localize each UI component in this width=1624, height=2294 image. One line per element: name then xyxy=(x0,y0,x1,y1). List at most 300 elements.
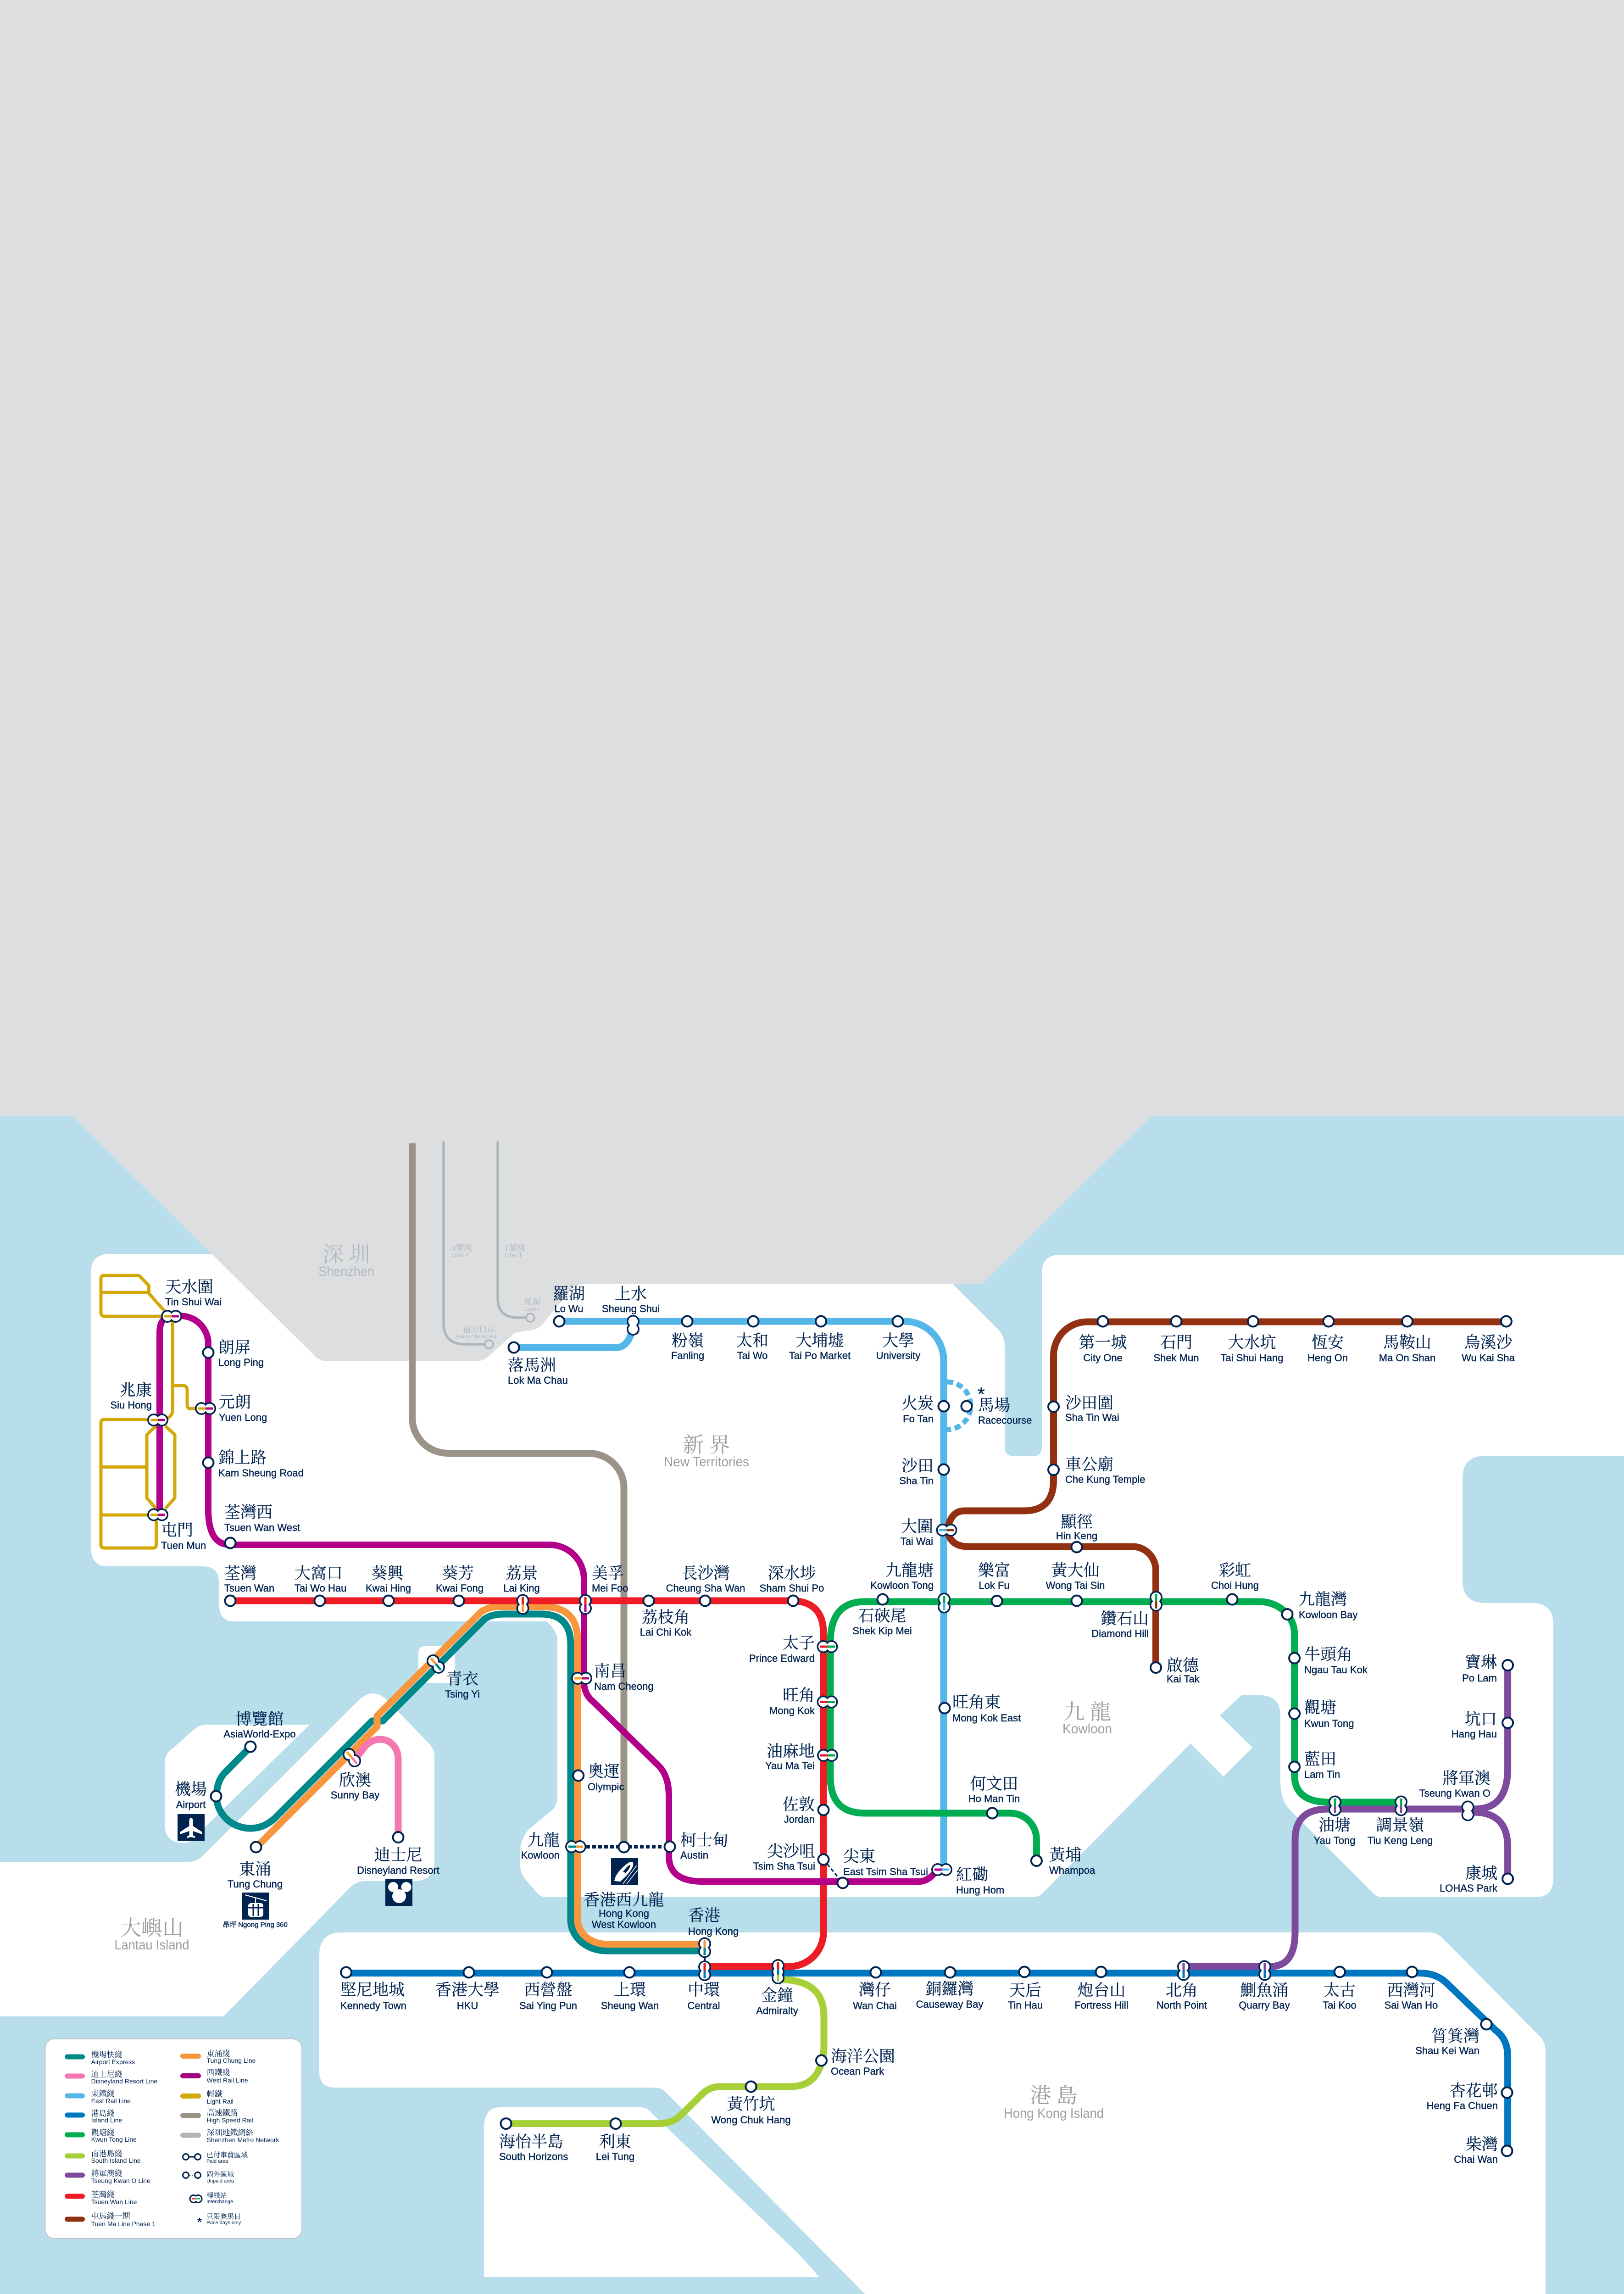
station: Cheung Sha Wan: 長沙灣 xyxy=(681,1565,730,1582)
station: Hang Hau: Hang Hau xyxy=(1452,1728,1497,1740)
station: Chai Wan: 柴灣 xyxy=(1466,2136,1498,2154)
station: Sai Ying Pun: Sai Ying Pun xyxy=(519,2000,577,2011)
station: Heng On: 恆安 xyxy=(1312,1334,1344,1352)
legend: Island Line: 港島綫 xyxy=(91,2109,115,2118)
station: South Horizons: 海怡半島 xyxy=(499,2133,563,2151)
land: Hong Kong Island xyxy=(319,1932,1546,2294)
legend: Tseung Kwan O Line xyxy=(65,2169,150,2184)
Luohu label: Luohu xyxy=(525,1307,539,1312)
station: Sha Tin: Sha Tin xyxy=(899,1475,934,1487)
legend: East Rail Line: 東鐵綫 xyxy=(91,2089,115,2098)
station: Fo Tan xyxy=(901,1395,949,1425)
station: Hong Kong: 香港 xyxy=(688,1907,720,1925)
legend: High Speed Rail: 高速鐵路 xyxy=(206,2109,238,2117)
station: Hong Kong West Kowloon: Hong Kong xyxy=(599,1908,649,1919)
legend: Tung Chung Line: 東涌綫 xyxy=(206,2049,230,2058)
station: Hin Keng: Hin Keng xyxy=(1056,1530,1097,1542)
station: Causeway Bay: Causeway Bay xyxy=(916,1999,983,2010)
station: Ho Man Tin: Ho Man Tin xyxy=(968,1793,1020,1804)
line 1 label xyxy=(505,1243,525,1258)
station: Lok Fu xyxy=(978,1562,1010,1606)
station: Lok Ma Chau: Lok Ma Chau xyxy=(508,1375,568,1386)
station: Ocean Park: Ocean Park xyxy=(831,2066,884,2077)
icon: airport plane xyxy=(178,1814,205,1841)
station: Kwai Fong xyxy=(436,1565,484,1606)
metro line 4 xyxy=(444,1141,484,1344)
region label: Shenzhen: 深 圳 xyxy=(323,1243,370,1266)
station: Che Kung Temple xyxy=(1048,1456,1145,1485)
station: Shau Kei Wan: 筲箕灣 xyxy=(1431,2027,1479,2045)
station: Tseung Kwan O: Tseung Kwan O xyxy=(1419,1787,1491,1799)
shenzhen metro lines xyxy=(444,1141,540,1348)
station: Sha Tin Wai xyxy=(1048,1394,1119,1423)
station: Wong Tai Sin: Wong Tai Sin xyxy=(1046,1580,1105,1591)
line: Tsuen Wan Line xyxy=(230,1601,823,1966)
legend: Paid area: Paid area xyxy=(206,2159,228,2164)
station: Tai Wo xyxy=(736,1316,768,1361)
station: Wong Chuk Hang xyxy=(711,2081,791,2126)
station: Causeway Bay: 銅鑼灣 xyxy=(925,1980,974,1998)
legend: Race days only: Race days only xyxy=(206,2220,241,2226)
station: Yau Tong xyxy=(1314,1796,1355,1846)
station: Tai Koo xyxy=(1323,1966,1357,2011)
station: Disneyland Resort xyxy=(357,1832,439,1876)
station: Kam Sheung Road: 錦上路 xyxy=(218,1449,267,1467)
station: Sheung Shui: Sheung Shui xyxy=(602,1303,660,1314)
station: Lai Chi Kok: Lai Chi Kok xyxy=(640,1626,692,1638)
station: Austin: Austin xyxy=(680,1849,708,1861)
legend: Tuen Ma Line Phase 1 xyxy=(65,2212,156,2227)
legend: Light Rail: Light Rail xyxy=(206,2098,234,2105)
station: Heng Fa Chuen xyxy=(1427,2082,1512,2111)
line: West Rail Line xyxy=(160,1316,937,1882)
station: Lei Tung xyxy=(596,2118,634,2162)
station: Tin Hau: Tin Hau xyxy=(1008,1999,1043,2011)
station: Cheung Sha Wan: Cheung Sha Wan xyxy=(666,1582,745,1594)
panel: legend xyxy=(45,2039,302,2238)
station: Shek Kip Mei xyxy=(852,1594,912,1637)
station: Tuen Mun xyxy=(147,1509,206,1551)
station: University: 大學 xyxy=(882,1332,914,1350)
station: Tai Po Market xyxy=(789,1316,851,1361)
land: Tsing Yi island xyxy=(418,1646,455,1683)
station: HKU xyxy=(435,1967,500,2011)
legend: Shenzhen Metro Network: Shenzhen Metro Network xyxy=(206,2136,279,2144)
line: Tseung Kwan O Line xyxy=(1184,1665,1508,1966)
station: Mong Kok: Mong Kok xyxy=(769,1705,815,1716)
station: Sheung Shui xyxy=(602,1285,660,1336)
station: Lai King xyxy=(503,1565,540,1615)
station: Long Ping: 朗屏 xyxy=(218,1339,250,1357)
legend: Tseung Kwan O Line: 將軍澳綫 xyxy=(91,2169,122,2178)
station: Kwai Fong: Kwai Fong xyxy=(436,1582,484,1594)
legend: Paid area: 已付車費區域 xyxy=(206,2151,248,2159)
station: Lai King: Lai King xyxy=(503,1582,540,1594)
station: Nam Cheong: 南昌 xyxy=(594,1662,626,1680)
station: Tin Shui Wai: Tin Shui Wai xyxy=(165,1296,222,1308)
station: Central: Central xyxy=(688,2000,720,2011)
station: Tai Shui Hang: Tai Shui Hang xyxy=(1221,1352,1283,1364)
station: Tin Shui Wai xyxy=(161,1278,222,1323)
legend: West Rail Line xyxy=(180,2068,248,2084)
station: Mong Kok East: 旺角東 xyxy=(952,1693,1001,1711)
station: Tsing Yi xyxy=(427,1654,480,1700)
station: Ngau Tau Kok: Ngau Tau Kok xyxy=(1304,1664,1368,1676)
station: Heng Fa Chuen: Heng Fa Chuen xyxy=(1427,2100,1498,2111)
station: Tai Po Market: Tai Po Market xyxy=(789,1350,851,1361)
station: Racecourse: Racecourse xyxy=(978,1414,1032,1426)
station: Shek Mun: 石門 xyxy=(1160,1334,1192,1352)
station: Tsing Yi: 青衣 xyxy=(446,1670,478,1688)
station: Kai Tak: Kai Tak xyxy=(1167,1673,1200,1685)
station: Disneyland Resort: Disneyland Resort xyxy=(357,1865,439,1876)
legend: East Rail Line: East Rail Line xyxy=(91,2097,131,2105)
link: Kowloon to Austin dotted unpaid xyxy=(580,1845,670,1849)
line 4 label: 4號綫 xyxy=(451,1243,472,1253)
legend: Race days only: * xyxy=(197,2215,202,2229)
station: Wan Chai xyxy=(853,1967,897,2011)
station: Sheung Shui: 上水 xyxy=(615,1285,647,1303)
legend: Tsuen Wan Line xyxy=(65,2190,137,2205)
Futian label: Futian Checkpoint xyxy=(456,1334,496,1340)
legend: Kwun Tong Line: 觀塘綫 xyxy=(91,2128,115,2137)
station: University xyxy=(876,1316,920,1361)
station: Wong Chuk Hang: Wong Chuk Hang xyxy=(711,2114,791,2126)
station: Lo Wu: Lo Wu xyxy=(554,1303,584,1314)
station: Sunny Bay xyxy=(331,1748,379,1801)
station: Jordan xyxy=(783,1796,829,1825)
Luohu label: 羅湖 xyxy=(524,1297,540,1306)
station: Kowloon xyxy=(521,1832,586,1861)
station: Yau Ma Tei xyxy=(765,1743,838,1771)
station: Fortress Hill: 炮台山 xyxy=(1077,1982,1126,1999)
station: Yuen Long xyxy=(195,1393,267,1423)
land: Ap Lei Chau xyxy=(484,2107,819,2277)
station: Hin Keng: 顯徑 xyxy=(1061,1513,1093,1531)
station: Airport: 機場 xyxy=(175,1781,207,1798)
station: Shek Mun: Shek Mun xyxy=(1153,1352,1199,1364)
station: Hang Hau: 坑口 xyxy=(1465,1710,1497,1728)
legend: High Speed Rail: High Speed Rail xyxy=(206,2116,253,2124)
line: Light Rail xyxy=(101,1275,200,1548)
station: Chai Wan: Chai Wan xyxy=(1454,2154,1498,2165)
region label: Hong Kong Island: 港 島 xyxy=(1030,2084,1078,2107)
station: Racecourse: 馬場 xyxy=(978,1397,1010,1414)
station: Shek Kip Mei: Shek Kip Mei xyxy=(852,1625,912,1637)
legend: Unpaid area: 閘外區域 xyxy=(206,2171,234,2178)
station: Kwai Hing xyxy=(366,1565,411,1606)
station: Po Lam: 寶琳 xyxy=(1465,1654,1497,1671)
station: Heng On xyxy=(1307,1316,1348,1364)
station: Kowloon Tong: Kowloon Tong xyxy=(870,1580,934,1591)
station: Fo Tan: Fo Tan xyxy=(903,1413,934,1425)
station: Ho Man Tin xyxy=(968,1775,1020,1819)
line: Disneyland Resort Line xyxy=(355,1739,398,1837)
station: Fanling: Fanling xyxy=(671,1350,704,1361)
Luohu station xyxy=(526,1314,534,1322)
icon: high speed train xyxy=(611,1858,638,1885)
station: Choi Hung: Choi Hung xyxy=(1211,1580,1259,1591)
legend: Kwun Tong Line: Kwun Tong Line xyxy=(91,2136,137,2143)
station: Tsim Sha Tsui: Tsim Sha Tsui xyxy=(753,1860,815,1872)
station: Sha Tin xyxy=(899,1457,949,1487)
station: Lai King: 荔景 xyxy=(506,1565,538,1582)
station: Lok Fu: 樂富 xyxy=(978,1562,1010,1580)
legend: Unpaid area xyxy=(183,2171,234,2184)
land: airport island xyxy=(165,1725,310,1843)
station: Sunny Bay: 欣澳 xyxy=(339,1771,371,1789)
station: North Point: 北角 xyxy=(1166,1982,1198,1999)
station: Tin Hau xyxy=(1008,1966,1043,2011)
legend: Interchange: 轉綫站 xyxy=(206,2191,227,2199)
station: Admiralty: Admiralty xyxy=(756,2005,798,2016)
station: Ngau Tau Kok xyxy=(1289,1646,1368,1676)
station: Sheung Wan: Sheung Wan xyxy=(601,2000,659,2011)
station: HKU: 香港大學 xyxy=(435,1981,500,1999)
legend: High Speed Rail xyxy=(180,2109,253,2124)
station: Olympic: Olympic xyxy=(588,1781,624,1793)
region label: Hong Kong Island: Hong Kong Island xyxy=(1004,2106,1104,2121)
station: Sai Wan Ho xyxy=(1385,1966,1438,2011)
station: Tai Wai xyxy=(901,1518,957,1547)
station: Lam Tin: 藍田 xyxy=(1304,1750,1336,1768)
station: Tin Hau: 天后 xyxy=(1009,1982,1041,1999)
Futian label: 福田口岸 xyxy=(462,1325,495,1334)
station: Jordan: 佐敦 xyxy=(783,1796,815,1814)
station: Tsing Yi: Tsing Yi xyxy=(445,1688,480,1700)
Futian label xyxy=(456,1325,496,1340)
station: Che Kung Temple: 車公廟 xyxy=(1065,1456,1113,1474)
region label: Lantau Island: 大嶼山 xyxy=(120,1916,184,1940)
Ngong Ping 360 caption: 昂坪 Ngong Ping 360 xyxy=(222,1921,288,1929)
station: Sheung Wan xyxy=(601,1967,659,2011)
legend: Shenzhen Metro Network xyxy=(180,2128,279,2144)
station: Hong Kong: Hong Kong xyxy=(688,1926,739,1937)
station: AsiaWorld-Expo xyxy=(223,1710,296,1752)
legend card xyxy=(45,2039,302,2238)
station: Nam Cheong: Nam Cheong xyxy=(594,1681,654,1692)
station: Ma On Shan: 馬鞍山 xyxy=(1383,1334,1431,1352)
legend: Disneyland Resort Line: 迪士尼綫 xyxy=(91,2070,122,2079)
station: Kennedy Town xyxy=(340,1967,406,2011)
station: Tai Koo: Tai Koo xyxy=(1323,1999,1357,2011)
station: Tsuen Wan: Tsuen Wan xyxy=(224,1582,274,1594)
station: Lo Wu xyxy=(553,1285,585,1327)
line 4 label: Line 4 xyxy=(451,1251,469,1258)
station: Lo Wu: 羅湖 xyxy=(553,1285,585,1303)
station: Mei Foo: 美孚 xyxy=(592,1565,624,1582)
station: Quarry Bay: Quarry Bay xyxy=(1239,1999,1290,2011)
legend: West Rail Line: 西鐵綫 xyxy=(206,2068,230,2077)
station: AsiaWorld-Expo: 博覽館 xyxy=(235,1710,284,1728)
station: Kwai Hing: Kwai Hing xyxy=(366,1582,411,1594)
station: Prince Edward: Prince Edward xyxy=(749,1653,815,1664)
station: Kam Sheung Road: Kam Sheung Road xyxy=(218,1467,304,1479)
region label: New Territories: 新 界 xyxy=(683,1433,730,1457)
link: Tsim Sha Tsui to East Tsim Sha Tsui xyxy=(823,1860,843,1883)
legend: Airport Express: 機場快綫 xyxy=(91,2050,122,2059)
legend: Interchange xyxy=(189,2191,233,2205)
station: Olympic: 奧運 xyxy=(588,1763,620,1781)
station: Lok Fu: Lok Fu xyxy=(979,1580,1010,1591)
station: LOHAS Park: LOHAS Park xyxy=(1440,1882,1498,1894)
legend: Disneyland Resort Line xyxy=(65,2070,158,2085)
station: Kwai Hing: 葵興 xyxy=(371,1565,404,1582)
legend: Race days only xyxy=(197,2213,241,2229)
line: Racecourse spur dashed xyxy=(947,1382,971,1430)
station: Mei Foo: Mei Foo xyxy=(592,1582,628,1594)
station: Nam Cheong xyxy=(571,1662,654,1692)
station: Cheung Sha Wan xyxy=(666,1565,745,1606)
station: Ocean Park: 海洋公園 xyxy=(831,2048,895,2066)
station: Sunny Bay: Sunny Bay xyxy=(331,1789,379,1801)
region label: Lantau Island xyxy=(115,1916,189,1953)
station: Chai Wan xyxy=(1454,2136,1512,2165)
line 4 label xyxy=(451,1243,472,1258)
station: Prince Edward: 太子 xyxy=(783,1634,815,1652)
station: Tung Chung: Tung Chung xyxy=(228,1878,283,1890)
region label: New Territories: New Territories xyxy=(664,1454,749,1470)
legend: Interchange: Interchange xyxy=(206,2199,233,2205)
station: Yau Tong: 油塘 xyxy=(1318,1816,1351,1834)
station: Prince Edward xyxy=(749,1634,838,1664)
legend: South Island Line: South Island Line xyxy=(91,2157,141,2164)
station: Tsuen Wan West xyxy=(224,1503,300,1548)
station: Whampoa xyxy=(1031,1846,1096,1876)
station: East Tsim Sha Tsui xyxy=(838,1848,928,1888)
station: Mong Kok East xyxy=(940,1693,1021,1724)
station: Wu Kai Sha: 烏溪沙 xyxy=(1464,1334,1513,1352)
station: Tai Shui Hang: 大水坑 xyxy=(1228,1334,1276,1352)
station: Disneyland Resort: 迪士尼 xyxy=(374,1846,423,1864)
legend: Light Rail: 輕鐵 xyxy=(206,2090,222,2099)
line 1 label: Line 1 xyxy=(505,1251,522,1258)
station: Long Ping xyxy=(203,1339,264,1368)
station: Kwai Fong: 葵芳 xyxy=(442,1565,474,1582)
station: Kowloon Tong xyxy=(870,1562,951,1613)
station: East Tsim Sha Tsui: 尖東 xyxy=(843,1848,875,1865)
station: Hong Kong West Kowloon xyxy=(584,1842,664,1930)
legend: Island Line: Island Line xyxy=(91,2116,122,2124)
station: HKU: HKU xyxy=(457,2000,478,2011)
station: Wong Tai Sin xyxy=(1046,1562,1105,1606)
Futian Checkpoint station xyxy=(485,1340,493,1348)
line: Tung Chung Line xyxy=(256,1607,705,1944)
station: Ocean Park xyxy=(816,2048,895,2077)
station: Hung Hom xyxy=(931,1863,1004,1896)
station: Tai Wo Hau: Tai Wo Hau xyxy=(295,1582,346,1594)
legend: South Island Line xyxy=(65,2149,141,2164)
station: Shau Kei Wan xyxy=(1415,2019,1492,2056)
station: Po Lam xyxy=(1462,1654,1513,1684)
legend: Airport Express: Airport Express xyxy=(91,2058,135,2066)
station: Lok Ma Chau xyxy=(508,1342,568,1386)
region label: Shenzhen: Shenzhen xyxy=(318,1264,374,1279)
legend: Tung Chung Line: Tung Chung Line xyxy=(206,2057,256,2064)
station: Tung Chung xyxy=(228,1842,283,1890)
region label: Kowloon xyxy=(1062,1700,1112,1737)
station: Long Ping: Long Ping xyxy=(218,1357,264,1368)
legend: Tung Chung Line xyxy=(180,2049,256,2064)
station: Sai Wan Ho: 西灣河 xyxy=(1387,1982,1435,1999)
station: Ma On Shan: Ma On Shan xyxy=(1379,1352,1435,1364)
station: Tsuen Wan: 荃灣 xyxy=(224,1565,256,1582)
station: Yuen Long: Yuen Long xyxy=(219,1412,267,1423)
station: Lei Tung: 利東 xyxy=(599,2133,631,2151)
legend: Paid area xyxy=(183,2151,248,2164)
station: Fanling xyxy=(671,1316,705,1361)
station: Kowloon: Kowloon xyxy=(521,1849,560,1861)
station: Hong Kong xyxy=(688,1907,739,1958)
station: Kennedy Town: Kennedy Town xyxy=(340,2000,406,2011)
station: Sham Shui Po: Sham Shui Po xyxy=(760,1582,824,1594)
station: Tai Wo Hau xyxy=(295,1565,346,1606)
station: Racecourse: * xyxy=(978,1384,985,1404)
station: Shau Kei Wan: Shau Kei Wan xyxy=(1415,2045,1479,2056)
station: City One: 第一城 xyxy=(1079,1334,1127,1352)
station: Tiu Keng Leng xyxy=(1368,1796,1433,1846)
station: Fortress Hill xyxy=(1074,1966,1129,2011)
station: Kwun Tong xyxy=(1289,1699,1354,1729)
station: Shek Mun xyxy=(1153,1316,1199,1364)
icon: Ngong Ping cable car xyxy=(242,1893,269,1920)
station: Sai Wan Ho: Sai Wan Ho xyxy=(1385,1999,1438,2011)
station: Diamond Hill xyxy=(1091,1591,1162,1639)
station: Po Lam: Po Lam xyxy=(1462,1672,1497,1684)
station: Tuen Mun: Tuen Mun xyxy=(161,1540,206,1551)
station: Tai Po Market: 大埔墟 xyxy=(795,1332,844,1350)
legend: Shenzhen Metro Network: 深圳地鐵網絡 xyxy=(206,2128,253,2137)
line: Tuen Ma Line Phase 1 xyxy=(948,1322,1506,1667)
station: Kai Tak xyxy=(1151,1657,1200,1685)
line: East Rail Line xyxy=(514,1321,944,1870)
station: Sai Ying Pun: 西營盤 xyxy=(524,1981,573,1999)
legend: West Rail Line: West Rail Line xyxy=(206,2077,248,2084)
Luohu label xyxy=(524,1297,540,1312)
station: Tai Shui Hang xyxy=(1221,1316,1283,1364)
station: Admiralty xyxy=(756,1959,798,2016)
land: Shenzhen grey area xyxy=(0,0,1624,1361)
station: Kowloon Tong: 九龍塘 xyxy=(885,1562,934,1580)
station: Lei Tung: Lei Tung xyxy=(596,2151,634,2162)
station: Ma On Shan xyxy=(1379,1316,1435,1364)
station: Tsuen Wan West: 荃灣西 xyxy=(224,1503,273,1521)
station: Tai Wai: Tai Wai xyxy=(901,1536,933,1547)
metro line 1 xyxy=(498,1141,526,1318)
legend: Tuen Ma Line Phase 1: 屯馬綫一期 xyxy=(91,2212,130,2221)
station: Wu Kai Sha xyxy=(1462,1316,1515,1364)
station: Whampoa: Whampoa xyxy=(1049,1865,1096,1876)
station: Tai Koo: 太古 xyxy=(1324,1982,1356,1999)
station: Yau Ma Tei: Yau Ma Tei xyxy=(765,1760,815,1771)
station: Tsim Sha Tsui: 尖沙咀 xyxy=(767,1843,815,1860)
station: Diamond Hill: Diamond Hill xyxy=(1091,1628,1149,1639)
station: Tseung Kwan O xyxy=(1419,1770,1491,1821)
station: Tung Chung: 東涌 xyxy=(239,1860,271,1878)
station: Siu Hong: 兆康 xyxy=(120,1381,152,1399)
region label: Kowloon: Kowloon xyxy=(1062,1721,1112,1737)
station: North Point: North Point xyxy=(1157,1999,1207,2011)
region label: New Territories xyxy=(664,1433,749,1470)
legend: Kwun Tong Line xyxy=(65,2128,137,2143)
station: Tai Wo Hau: 大窩口 xyxy=(295,1565,343,1582)
station: Heng On: Heng On xyxy=(1307,1352,1348,1364)
station: Lai Chi Kok xyxy=(640,1596,692,1638)
station: City One: City One xyxy=(1083,1352,1123,1364)
station: Sai Ying Pun xyxy=(519,1967,577,2011)
station: Tsuen Wan xyxy=(224,1565,274,1606)
station: AsiaWorld-Expo: AsiaWorld-Expo xyxy=(223,1728,296,1740)
